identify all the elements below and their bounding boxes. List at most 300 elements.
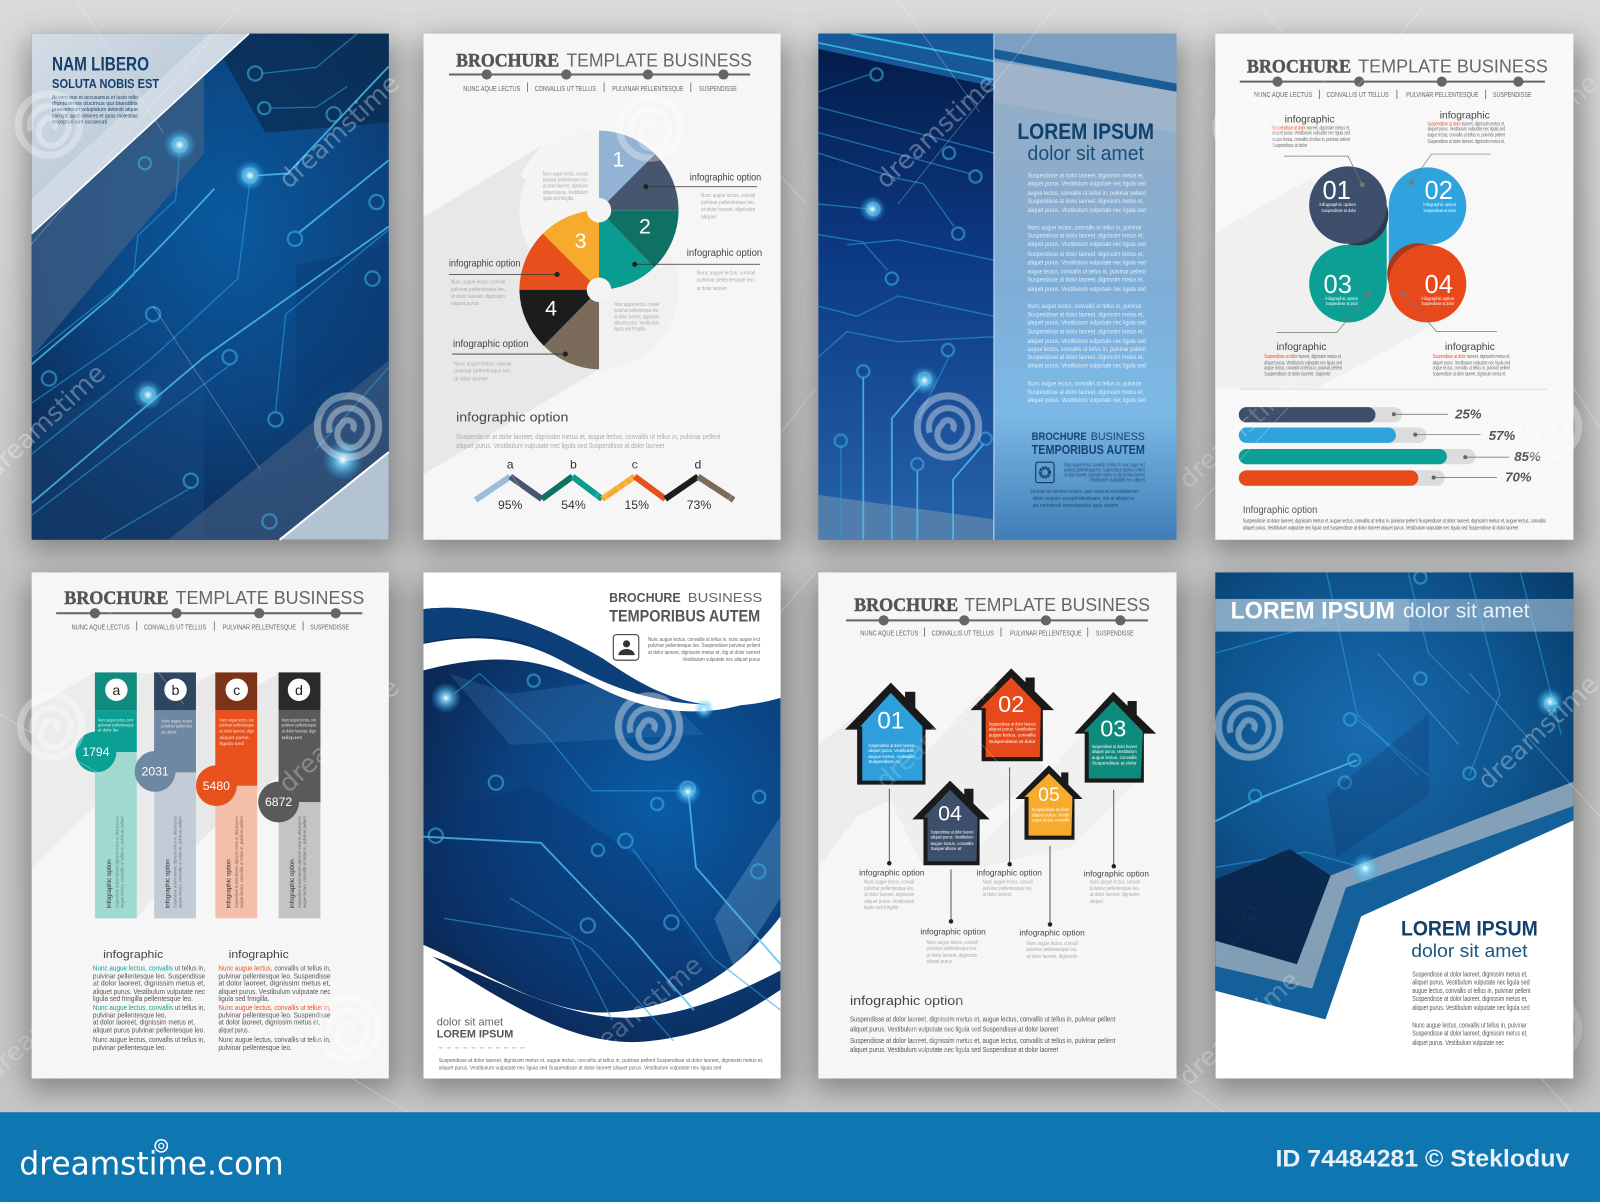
column d: Nunc augue lectus, con	[282, 717, 317, 722]
callouts: Suspendisse at dolor laoreet. Sapiente	[1264, 371, 1331, 377]
house 05: Suspendisse at dolor	[1032, 807, 1070, 812]
footer text	[1243, 505, 1546, 532]
house captions: Nunc augue lectus, convall	[927, 940, 978, 946]
callouts: pulvinar pellentesque leo,	[454, 368, 512, 374]
text side: ea commodi consequatur quis autem	[1033, 503, 1118, 509]
text side: Nunc augue lectus, convallis ut tellus in, pulvinar	[1028, 303, 1142, 310]
house 05: 05	[1038, 784, 1060, 806]
cover title: praesentium voluptatum deleniti atque	[52, 107, 138, 113]
header: NUNC AQUE LECTUS	[1254, 90, 1312, 99]
pie chart: pulvinar pellentesque leo,	[614, 308, 659, 314]
intro text: at dolor laoreet, dignissim metus et, dig at dolor laoreet	[648, 650, 761, 656]
section text: Suspendisse at dolor laoreet, dignissim metus et, augue lectus, convallis ut tellus in, pulvinar pellent	[456, 433, 720, 441]
text side: Nunc augue lectus, convallis ut tellus in, pulvinar	[1028, 381, 1142, 388]
callouts: aliquet purus	[451, 301, 479, 307]
headline: BROCHURE	[609, 590, 681, 605]
house 01: Suspendisse at dolor laoreet	[868, 743, 915, 748]
callouts: augue lectus, convallis ut tellus in, pulvinar pellent	[1272, 137, 1350, 143]
zigzag chart: 95%	[498, 498, 523, 512]
lower text: Suspendisse at dolor laoreet, dignissim metus et,	[1412, 996, 1528, 1003]
column a: pulvinar pellentesque	[98, 723, 134, 728]
pie chart: aliquet purus. Vestibulum	[543, 190, 588, 196]
text side: BUSINESS	[1091, 431, 1145, 443]
text side: aliquet purus. Vestibulum vulputate nec ligula sed	[1028, 319, 1146, 326]
lower text: Suspendisse at dolor laoreet, dignissim metus et,	[1412, 1031, 1528, 1038]
title band	[1215, 597, 1573, 632]
left text column: Nunc augue lectus, convallis ut tellus in,	[93, 1035, 205, 1044]
callouts: aliquet purus. Vestibulum vulputate nec ligula sed	[1272, 131, 1350, 137]
header: PULVINAR PELLENTESQUE	[222, 623, 296, 632]
dark inner facet	[1215, 849, 1331, 964]
text side: at dolor laoreet, dignissim metus et, dig at dolor laoreet	[1064, 473, 1145, 479]
callouts	[1264, 110, 1511, 377]
icon: people	[613, 635, 639, 660]
house 02: Suspendisse at dolor laoreet	[989, 721, 1036, 726]
callouts: Suspendisse at dolor laoreet, dignissim metus et,	[1264, 354, 1342, 360]
pie chart: ligula sed fringilla	[614, 327, 645, 333]
house captions: aliquet purus	[927, 959, 952, 965]
left text column	[93, 949, 205, 1052]
house 02: Suspendisse at dolor	[989, 739, 1036, 744]
text side: aliquet purus. Vestibulum vulputate nec ligula sed	[1028, 338, 1146, 345]
long shadow	[423, 146, 653, 474]
column b: infographic option	[164, 859, 171, 908]
header: SUSPENDISSE	[699, 84, 737, 93]
column c	[196, 672, 257, 918]
column d: d	[295, 683, 303, 699]
lower caption: dolor sit amet	[437, 1016, 504, 1028]
intro text	[648, 637, 761, 663]
quatrefoil: Suspendisse at dolor	[1321, 208, 1356, 213]
house 04: aliquet purus. Vestibulum	[931, 835, 974, 840]
cover title: At vero eos et accusamus et iusto odio	[52, 95, 138, 101]
column c: c	[233, 683, 240, 699]
column c: Nunc augue lectus, con	[219, 717, 254, 722]
blue wave	[423, 608, 781, 1042]
header: SUSPENDISSE	[310, 623, 349, 632]
quatrefoil	[1309, 166, 1466, 322]
watermark overlay: dreamstime	[1173, 368, 1306, 495]
lower caption: aliquet purus. Vestibulum vulputate nec ligula sed Suspendisse at dolor laoreet aliquet purus. Vestibulum vulputate nec ligula sed	[439, 1065, 721, 1071]
section text: Suspendisse at dolor laoreet, dignissim metus et, augue lectus, convallis ut tellus in, pulvinar pellent	[850, 1037, 1115, 1045]
column a: Nunc augue lectus, conv	[98, 717, 134, 722]
house captions: ligula sed fringilla	[864, 905, 899, 911]
column a: a	[112, 683, 120, 699]
watermark overlay: dreamstime	[870, 670, 1003, 796]
bar chart: 85%	[1514, 449, 1541, 464]
quatrefoil: infographic option	[1325, 296, 1359, 301]
header: BROCHURE	[456, 50, 559, 71]
column a: at dolor lao	[98, 728, 119, 733]
header: CONVALLIS UT TELLUS	[144, 623, 206, 632]
header	[56, 587, 364, 632]
callouts: Nunc augue lectus, convall	[697, 270, 755, 276]
house 05	[1015, 765, 1083, 840]
zigzag chart: 54%	[561, 498, 586, 512]
house captions: Nunc augue lectus, convall	[1090, 880, 1140, 886]
callouts: aliquet purus. Vestibulum vulputate nec ligula sed	[1433, 360, 1510, 366]
watermark overlay: dreamstime	[870, 69, 1003, 195]
long shadows	[818, 714, 929, 867]
watermark overlay: dreamstime	[273, 673, 406, 799]
section text	[850, 993, 1115, 1054]
circuit lines	[1215, 571, 1564, 959]
callouts: Nunc augue lectus, convall	[454, 361, 511, 367]
left text column: aliquet purus. Vestibulum vulputate nec	[93, 987, 205, 996]
pie chart: at dolor laoreet, dignissim	[543, 184, 588, 190]
pie chart: at dolor laoreet, dignissim	[614, 314, 659, 320]
lower caption: LOREM IPSUM	[437, 1029, 513, 1041]
callouts: infographic option	[687, 248, 762, 259]
quatrefoil: infographic option	[1421, 296, 1454, 301]
bar chart: 70%	[1505, 470, 1532, 485]
header: TEMPLATE BUSINESS	[566, 49, 752, 70]
zigzag chart: c	[632, 457, 638, 471]
house captions: infographic option	[977, 867, 1042, 877]
column b: Nunc augue lectus	[161, 718, 192, 723]
quatrefoil: Suspendisse at dolor	[1423, 208, 1456, 213]
lower caption	[437, 1016, 764, 1071]
callouts: infographic option	[449, 258, 520, 269]
callouts: augue lectus, convallis ut tellus in, pulvinar pellent	[1433, 365, 1511, 371]
callouts: infographic	[1285, 114, 1335, 125]
watermark overlay: dreamstime	[273, 69, 406, 195]
column a: 1794	[82, 745, 110, 759]
glowing nodes	[133, 129, 363, 481]
lower text: aliquet purus. Vestibulum vulputate nec ligula sed	[1412, 1005, 1530, 1012]
house captions: at dolor laoreet, dignissim	[927, 953, 978, 959]
callouts: augue lectus, convallis ut tellus in, pulvinar pellent	[1428, 133, 1505, 139]
column c: infographic option	[226, 859, 233, 908]
left text column: at dolor laoreet, dignissim metus et,	[93, 1017, 195, 1026]
pie chart: 1	[612, 147, 624, 171]
quatrefoil: Suspendisse at dolor	[1421, 301, 1454, 306]
text side: TEMPORIBUS AUTEM	[1032, 442, 1145, 457]
pie chart: Nunc augue lectus, convall	[543, 172, 588, 178]
lower text: LOREM IPSUM	[1401, 917, 1538, 941]
header: BROCHURE	[854, 595, 958, 616]
house captions: infographic option	[1084, 869, 1149, 879]
callouts: infographic	[1440, 110, 1490, 121]
callouts: aliquet purus. Vestibulum vulputate nec ligula sed	[1264, 360, 1342, 366]
house captions: pulvinar pellentesque leo,	[1090, 886, 1140, 892]
text side: aliquet purus. Vestibulum vulputate nec ligula sed	[1028, 181, 1146, 188]
left text column: pulvinar pellentesque leo.	[93, 1043, 166, 1052]
right text column: pulvinar pellentesque leo.	[218, 1043, 292, 1052]
section text: Suspendisse at dolor laoreet, dignissim metus et, augue lectus, convallis ut tellus in, pulvinar pellent	[850, 1015, 1115, 1023]
callouts: pulvinar pellentesque leo,	[451, 287, 505, 293]
callouts: Nunc augue lectus, convall	[701, 193, 755, 199]
white corner	[1215, 820, 1573, 1079]
title band: dolor sit amet	[1403, 600, 1530, 622]
text side: Vestibulum vulputate nec aliquet	[1090, 478, 1145, 484]
column d: infographic option	[289, 859, 296, 908]
header: BROCHURE	[64, 588, 168, 609]
callouts: Suspendisse at dolor laoreet, dignissim metus et,	[1428, 139, 1505, 145]
house captions: Nunc augue lectus, convall	[864, 880, 914, 886]
header: BROCHURE	[1247, 56, 1351, 77]
house captions: Nunc augue lectus, convall	[1027, 941, 1078, 947]
house captions: infographic option	[920, 927, 986, 937]
callouts: augue lectus, convallis ut tellus in, pulvinar pellent	[1264, 365, 1342, 371]
header	[449, 49, 752, 93]
top-left corner wedge	[32, 34, 249, 234]
text side: Suspendisse at dolor laoreet, dignissim metus et,	[1028, 173, 1144, 180]
panel: quatrefoil and progress bars	[1215, 34, 1573, 540]
left text column: pulvinar pellentesque leo,	[93, 1010, 166, 1019]
cover title: dignissimos ducimus qui blanditiis	[52, 101, 138, 107]
text side: Suspendisse at dolor laoreet, dignissim metus et,	[1028, 329, 1144, 336]
text side: augue lectus, convallis ut tellus in, pulvinar pellent	[1028, 268, 1146, 275]
header	[1240, 55, 1548, 99]
zigzag chart: 15%	[624, 498, 649, 512]
intro text: Nunc augue lectus, convallis ut tellus in, nunc augue lect	[648, 637, 761, 643]
callouts: Suspendisse at dolor laoreet, dignissim metus et,	[1428, 122, 1505, 128]
column b: pulvinar pellentes	[161, 724, 192, 729]
long shadows	[32, 672, 154, 918]
callouts: pulvinar pellentesque leo,	[701, 200, 755, 206]
left text column: Nunc augue lectus, convallis ut tellus in,	[93, 1003, 205, 1012]
lower text: aliquet purus. Vestibulum vulputate nec	[1412, 1040, 1504, 1047]
column b: augue lectus, convallis ut tellus in, pulvinar pellent	[178, 816, 183, 908]
column c: 5480	[203, 779, 230, 793]
header: PULVINAR PELLENTESQUE	[1406, 90, 1479, 99]
text side: augue lectus, convallis ut tellus in, pulvinar pellent	[1028, 346, 1146, 353]
left text column: infographic	[103, 949, 164, 961]
left text column: Nunc augue lectus, convallis ut tellus in,	[93, 963, 205, 972]
bar chart	[1239, 406, 1541, 486]
panel: column stats brochure	[32, 572, 389, 1079]
column c: augue lectus, convallis ut tellus in, pulvinar pellent	[239, 816, 244, 908]
text side	[994, 34, 1177, 540]
house captions: at dolor laoreet	[983, 892, 1012, 898]
logo wordmark: dreamstime.com	[19, 1146, 284, 1182]
section text: aliquet purus. Vestibulum vulputate nec ligula sed Suspendisse at dolor laoreet	[456, 442, 664, 450]
stems	[887, 767, 1116, 927]
house captions: at dolor laoreet, dignissim	[864, 892, 914, 898]
house captions: pulvinar pellentesque leo,	[927, 946, 978, 952]
zigzag chart: 73%	[687, 498, 711, 512]
house 01	[845, 683, 937, 785]
panel: blue text brochure	[818, 34, 1177, 540]
house captions: infographic option	[859, 867, 925, 877]
house captions: aliquet purus. Vestibulum	[864, 899, 914, 905]
panel: wave cover	[423, 572, 781, 1079]
pie chart: aliquet purus. Vestibulum	[614, 320, 659, 326]
panel: blue cover with title	[32, 34, 389, 540]
panel: houses brochure	[818, 572, 1177, 1079]
column b: b	[172, 683, 180, 699]
house 02: aliquet purus. Vestibulum	[989, 727, 1036, 732]
house 02	[970, 668, 1054, 761]
column d: Suspendisse at dolor laoreet, dignissim metus et, aliquet purus	[297, 816, 302, 908]
quatrefoil: infographic option	[1423, 202, 1456, 207]
callouts: Nunc augue lectus, convall	[451, 280, 505, 286]
column b	[135, 672, 196, 918]
text side: pulvinar pellentesque leo. Suspendisse pulvinar pellent	[1064, 467, 1145, 473]
text side: Suspendisse at dolor laoreet, dignissim metus et,	[1028, 233, 1144, 240]
circuit side	[818, 34, 994, 540]
column d: aliquet	[282, 735, 303, 740]
house 01: 01	[877, 708, 904, 735]
cover title	[52, 53, 159, 125]
house 01: Suspendisse at	[868, 759, 900, 764]
pie chart: 4	[545, 296, 557, 320]
house 03: Suspendisse at dolor	[1092, 760, 1137, 765]
header: PULVINAR PELLENTESQUE	[612, 84, 684, 93]
column a: infographic option	[106, 859, 113, 908]
bottom-right corner wedge	[280, 452, 389, 540]
blue field	[1215, 572, 1573, 1079]
left text column: aliquet purus pulvinar pellentesque leo.	[93, 1026, 205, 1035]
pie chart: pulvinar pellentesque leo,	[543, 178, 588, 184]
right text column: pulvinar pellentesque leo. Suspendisse	[218, 1010, 331, 1019]
column d: augue lectus, convallis ut tellus in, pulvinar pellent	[302, 816, 307, 908]
header: NUNC AQUE LECTUS	[463, 84, 520, 93]
grey folded band	[1215, 782, 1573, 989]
zigzag chart: a	[507, 457, 514, 471]
text side: Suspendisse at dolor laoreet, dignissim metus et,	[1028, 251, 1144, 258]
column d: 6872	[265, 795, 292, 809]
house captions: at dolor laoreet, dignissim	[1027, 954, 1078, 960]
house 05: augue lectus, convallis	[1032, 817, 1069, 822]
column b: Suspendisse at dolor laoreet, dignissim metus et, aliquet purus	[173, 816, 178, 908]
quatrefoil: 03	[1324, 271, 1352, 299]
cover title: NAM LIBERO	[52, 53, 149, 75]
house 04	[912, 781, 990, 865]
text side: BROCHURE	[1032, 431, 1087, 443]
watermark overlay: dreamstime	[572, 404, 709, 526]
section text: infographic option	[456, 409, 568, 424]
circuit lines	[423, 673, 781, 1041]
right text column: infographic	[229, 949, 289, 961]
house 04: Suspendisse at dolor laoreet	[931, 830, 974, 835]
house 04: 04	[938, 801, 962, 825]
zigzag chart	[476, 457, 734, 512]
title band: LOREM IPSUM	[1231, 597, 1395, 624]
pie chart: 2	[639, 215, 651, 239]
headline: TEMPORIBUS AUTEM	[609, 607, 760, 625]
column c: aliquet purus.	[219, 735, 250, 740]
text side: Suspendisse at dolor laoreet, dignissim metus et,	[1028, 354, 1144, 361]
bar chart: 57%	[1489, 428, 1515, 443]
header: NUNC AQUE LECTUS	[860, 629, 918, 638]
callouts: infographic option	[453, 339, 529, 350]
header: CONVALLIS UT TELLUS	[932, 629, 994, 638]
header: CONVALLIS UT TELLUS	[535, 84, 596, 93]
text side: Nunc augue lectus, convallis ut tellus in, pulvinar	[1028, 225, 1142, 232]
house 04: augue lectus, convallis	[931, 841, 974, 846]
header: SUSPENDISSE	[1493, 90, 1532, 99]
right text column: Nunc augue lectus, convallis ut tellus in,	[218, 1035, 331, 1044]
house captions: pulvinar pellentesque leo,	[1027, 947, 1078, 953]
left text column: pulvinar pellentesque leo. Suspendisse	[93, 972, 205, 981]
lower text: Nunc augue lectus, convallis ut tellus in, pulvinar	[1412, 1023, 1527, 1030]
house 02: augue lectus, convallis	[989, 733, 1036, 738]
headline	[609, 590, 762, 625]
pie chart: 3	[575, 229, 587, 253]
headline: BUSINESS	[688, 590, 762, 605]
bar chart: 25%	[1454, 406, 1482, 421]
footer text: Infographic option	[1243, 505, 1317, 516]
pie chart: ligula sed fringilla	[543, 196, 574, 202]
callouts: infographic option	[690, 173, 761, 184]
callouts: infographic	[1277, 342, 1327, 353]
header: PULVINAR PELLENTESQUE	[1010, 629, 1082, 638]
column d: pulvinar pellentesque	[282, 723, 317, 728]
header: TEMPLATE BUSINESS	[964, 594, 1150, 615]
zigzag chart: b	[570, 457, 577, 471]
section text: aliquet purus. Vestibulum vulputate nec ligula sed Suspendisse at dolor laoreet	[850, 1026, 1058, 1034]
column c: Suspendisse at dolor laoreet, dignissim metus et, aliquet purus	[234, 816, 239, 908]
pie chart	[519, 131, 679, 369]
section text: aliquet purus. Vestibulum vulputate nec ligula sed Suspendisse at dolor laoreet	[850, 1046, 1058, 1054]
header: SUSPENDISSE	[1096, 629, 1134, 638]
header: CONVALLIS UT TELLUS	[1327, 90, 1389, 99]
footer bar	[0, 1112, 1600, 1202]
header: TEMPLATE BUSINESS	[1358, 55, 1548, 76]
house captions: Nunc augue lectus, convall	[983, 880, 1033, 886]
right text column: aliquet purus. Vestibulum vulputate nec	[218, 987, 331, 996]
column d	[258, 672, 320, 918]
house captions	[859, 867, 1149, 965]
text side: Suspendisse at dolor laoreet, dignissim metus et,	[1028, 311, 1144, 318]
house 02: 02	[998, 691, 1024, 717]
column c: ligula sed	[219, 741, 244, 746]
column d: at dolor laoreet, dign	[282, 729, 317, 734]
left text column: at dolor laoreet, dignissim metus et,	[93, 979, 205, 988]
text side: Ut enim ad minima veniam, quis nostrum exercitationem	[1031, 489, 1139, 495]
icon: gear	[1036, 462, 1054, 483]
lower text	[1401, 917, 1538, 1047]
band to white shadow	[1215, 806, 1573, 1019]
header: NUNC AQUE LECTUS	[71, 623, 130, 632]
header	[846, 594, 1150, 638]
house captions: pulvinar pellentesque leo,	[864, 886, 915, 892]
callouts: aliquet	[701, 214, 717, 220]
text side: Suspendisse at dolor laoreet, dignissim metus et,	[1028, 198, 1144, 205]
text side: augue lectus, convallis ut tellus in, pulvinar pellent	[1028, 190, 1146, 197]
watermark overlay: dreamstime	[572, 950, 709, 1072]
house captions: pulvinar pellentesque leo,	[983, 886, 1033, 892]
house 05: aliquet purus. Vestib	[1032, 812, 1070, 817]
lower text: Suspendisse at dolor laoreet, dignissim metus et,	[1412, 971, 1528, 978]
column a: augue lectus, convallis ut tellus in, pulvinar pellent	[119, 816, 124, 908]
long shadow	[1215, 179, 1449, 389]
house 01: augue lectus, convallis	[868, 754, 915, 759]
panel: pie chart brochure	[423, 34, 781, 540]
panel: cover with angled white corner	[1215, 571, 1573, 1079]
column b: at dolor	[161, 730, 177, 735]
pie chart: Nunc augue lectus, convall	[614, 302, 659, 308]
column c: at dolor laoreet, dign	[219, 729, 254, 734]
right text column: pulvinar pellentesque leo. Suspendisse	[218, 972, 331, 981]
text side: aliquet purus. Vestibulum vulputate nec ligula sed	[1028, 286, 1146, 293]
text side: aliquet purus. Vestibulum vulputate nec ligula sed	[1028, 362, 1146, 369]
intro text: pulvinar pellentesque leo. Suspendisse pulvinar pellent	[648, 643, 761, 649]
lower text: augue lectus, convallis ut tellus in, pulvinar pellent	[1412, 988, 1531, 995]
callouts: at dolor laoreet	[697, 286, 727, 292]
house 03	[1074, 692, 1156, 783]
circuit lines	[32, 34, 389, 540]
watermark overlay: dreamstime	[1173, 965, 1306, 1092]
quatrefoil: 04	[1425, 271, 1453, 299]
right text column: Nunc augue lectus, convallis ut tellus in,	[218, 1003, 331, 1012]
text side: LOREM IPSUM	[1017, 119, 1154, 144]
intro text: Vestibulum vulputate nec aliquet purus	[683, 657, 760, 663]
house captions: at dolor laoreet, dignissim	[1090, 892, 1140, 898]
column a	[76, 672, 137, 918]
